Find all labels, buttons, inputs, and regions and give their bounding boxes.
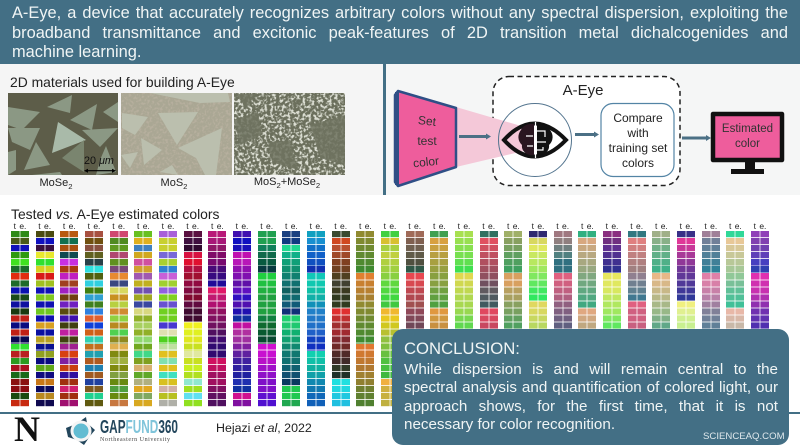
column 12 [282,222,300,407]
conclusion line 1: While dispersion is and will remain central to the [404,361,778,378]
monitor [713,114,782,174]
conclusion heading: CONCLUSION: [404,339,520,358]
column 30 [726,222,744,330]
column 1: t e. [14,221,26,231]
column 23 [554,222,572,330]
left panel: 2D materials [0,64,384,195]
column 28 [677,222,695,330]
right panel background [386,64,800,195]
column 9: t e. [211,221,224,231]
column 20 [480,222,498,330]
column 27 [652,222,670,330]
column 28: t e. [680,221,692,231]
column 11: t e. [260,221,273,231]
column 7: t e. [162,221,174,231]
monitor text: Estimated [722,123,773,135]
column 17: t e. [408,221,421,231]
column 2: t e. [38,221,51,231]
compare text: colors [622,156,654,170]
chart heading: Tested vs. A-Eye estimated colors [11,206,219,222]
conclusion line 4: necessary for color recognition. [404,416,615,433]
column 19: t e. [458,221,470,231]
logo mark [66,417,95,445]
label: MoS2+MoSe2: MoS2+MoSe2 [254,176,320,190]
column 16 [381,222,399,407]
header banner [0,0,800,64]
label: MoSe2: MoSe2 [39,177,73,191]
compare box [601,104,674,176]
column 26 [628,222,646,330]
citation: Hejazi et al, 2022 [216,421,312,435]
arrow: screen to A-Eye [459,134,491,140]
header line 3: machine learning. [12,43,141,61]
logo: GapFund360 [66,416,178,445]
scale label: 20 μm [84,155,114,167]
column 31: t e. [754,221,766,231]
column 4: t e. [88,221,100,231]
column 1 [11,222,29,407]
column 12: t e. [285,221,298,231]
A-Eye title: A-Eye [563,82,603,99]
conclusion line 2: spectral analysis and quantification of colored light, our [404,379,778,396]
diagram: A-Eye workflow [394,76,784,188]
column 30: t e. [729,221,742,231]
logo subtitle: Northeastern University [100,437,170,443]
column 7 [159,222,177,407]
column 18: t e. [433,221,446,231]
light beam [456,107,528,167]
column 20: t e. [482,221,495,231]
label: MoS2: MoS2 [161,177,187,191]
column 23: t e. [556,221,569,231]
screen text: Set [417,113,437,129]
column 19 [455,222,473,330]
column 25: t e. [606,221,618,231]
column 18 [430,222,448,330]
screen text [412,113,440,170]
column 8: t e. [186,221,199,231]
column 10 [233,222,251,407]
scale bar [84,155,116,173]
panel divider [383,64,386,195]
column 25 [603,222,621,330]
panel heading: 2D materials used for building A-Eye [10,74,235,90]
test color screen [395,91,456,186]
column 27: t e. [655,221,668,231]
column 15 [356,222,374,407]
column 24: t e. [581,221,594,231]
A-Eye dashed box [493,76,680,186]
column 21: t e. [507,221,520,231]
column 13 [307,222,325,407]
column 15: t e. [359,221,372,231]
header line 1: A-Eye, a device that accurately recognizes arbitrary colors without any spectral dispersion, exploiting the [12,4,788,22]
monitor text [722,123,773,150]
arrow: A-Eye to monitor [682,135,711,141]
column 13: t e. [310,221,322,231]
column 3: t e. [63,221,76,231]
micrographs [8,93,345,175]
column 22: t e. [532,221,544,231]
column 10: t e. [236,221,248,231]
column 11 [258,222,276,407]
column 22 [529,222,547,330]
photo: MoS2+MoSe2 [234,93,345,175]
arrow: eye to compare [575,132,599,138]
column 4 [85,222,103,407]
icon: eye with brain [504,122,566,158]
monitor text: color [735,138,760,150]
column 8 [184,222,202,407]
column 21 [504,222,522,330]
compare text: training set [609,141,668,155]
compare text [609,111,668,170]
column 29 [702,222,720,330]
column 5: t e. [112,221,125,231]
conclusion line 3: approach shows, for the first time, that it is not [404,398,778,414]
column 5 [110,222,128,407]
watermark: SCIENCEAQ.COM [703,431,785,442]
column 14: t e. [334,221,347,231]
eye circle [498,104,572,176]
column 2 [36,222,54,407]
column 29: t e. [704,221,717,231]
conclusion box [392,329,789,445]
compare text: Compare [613,111,663,125]
column 3 [60,222,78,407]
header line 2: broadband transmittance and excitonic peak-features of 2D transition metal dichalcogenides and [12,24,788,42]
footer rule [0,412,800,414]
column 9 [208,222,226,407]
column 17 [406,222,424,330]
photo: MoS2 [121,93,232,175]
column 6 [134,222,152,407]
screen text: test [417,134,437,148]
column 26: t e. [630,221,643,231]
column 6: t e. [137,221,150,231]
screen text: color [412,154,440,170]
column 24 [578,222,596,330]
compare text: with [626,126,649,140]
color comparison chart [11,221,769,407]
column 16: t e. [384,221,396,231]
column 31 [751,222,769,330]
column 14 [332,222,350,407]
photo: MoSe2 [8,93,118,175]
